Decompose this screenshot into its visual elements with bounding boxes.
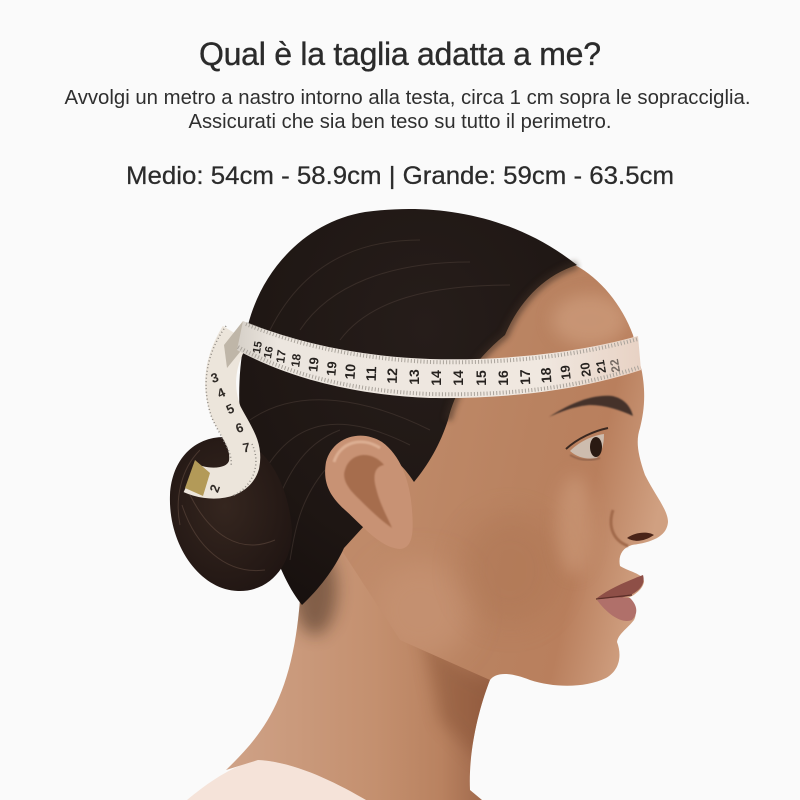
soft hairline bbox=[448, 265, 577, 420]
hair bbox=[239, 209, 577, 605]
forehead highlight bbox=[552, 294, 628, 346]
tape numbers: 21 bbox=[593, 359, 609, 374]
measuring tape band bbox=[237, 321, 641, 398]
shadow at nape bbox=[293, 545, 337, 635]
tape numbers: 16 bbox=[495, 370, 511, 386]
eye bbox=[566, 428, 608, 460]
cheek shading bbox=[460, 515, 560, 625]
tape numbers: 22 bbox=[607, 358, 623, 373]
tape numbers: 11 bbox=[363, 366, 379, 382]
tape numbers: 2 bbox=[206, 482, 223, 494]
tape numbers: 18 bbox=[537, 367, 555, 384]
tape numbers: 19 bbox=[557, 364, 574, 380]
measuring tape loop bbox=[185, 321, 256, 496]
blend into neck bbox=[386, 570, 466, 652]
instructions text: Avvolgi un metro a nastro intorno alla testa, circa 1 cm sopra le sopracciglia. bbox=[64, 87, 750, 109]
tape numbers bbox=[251, 340, 623, 386]
tape numbers: 10 bbox=[341, 363, 359, 380]
tape numbers: 20 bbox=[577, 361, 594, 378]
ear bbox=[325, 436, 413, 549]
instructions text: Assicurati che sia ben teso su tutto il perimetro. bbox=[188, 111, 612, 133]
tape numbers: 17 bbox=[517, 369, 533, 385]
tape numbers: 7 bbox=[241, 440, 251, 456]
size ranges: Medio: 54cm - 58.9cm | Grande: 59cm - 63.5cm bbox=[126, 162, 674, 190]
tape numbers: 14 bbox=[450, 370, 466, 386]
shaded tape top bbox=[224, 321, 243, 368]
nostril bbox=[611, 510, 654, 546]
hair strands bbox=[250, 240, 510, 560]
shadow under jaw bbox=[422, 650, 490, 756]
tape numbers: 5 bbox=[224, 401, 237, 417]
neck and shoulder bbox=[226, 552, 490, 800]
tape numbers: 17 bbox=[273, 349, 289, 364]
tape numbers: 12 bbox=[384, 368, 400, 384]
garment strap bbox=[187, 760, 366, 800]
tape numbers: 18 bbox=[288, 353, 304, 368]
tape numbers: 3 bbox=[209, 369, 220, 386]
title: Qual è la taglia adatta a me? bbox=[199, 36, 601, 72]
tape numbers: 6 bbox=[233, 419, 245, 436]
tape numbers: 16 bbox=[262, 345, 276, 360]
tape numbers: 19 bbox=[323, 361, 340, 376]
metal tip bbox=[185, 460, 210, 496]
tape shaded edges bbox=[246, 324, 638, 362]
hair bun bbox=[170, 437, 292, 591]
tape numbers: 14 bbox=[428, 370, 444, 386]
tape numbers: 19 bbox=[305, 357, 322, 373]
instructions text bbox=[64, 87, 750, 133]
lips bbox=[596, 575, 644, 621]
tape numbers bbox=[206, 369, 251, 494]
head skin bbox=[335, 255, 668, 686]
eyebrow bbox=[549, 396, 633, 417]
tape numbers: 4 bbox=[215, 384, 228, 401]
cheek highlight bbox=[557, 475, 593, 575]
tape numbers: 15 bbox=[473, 370, 489, 386]
tape numbers: 13 bbox=[406, 369, 422, 385]
tape numbers: 15 bbox=[251, 340, 265, 355]
